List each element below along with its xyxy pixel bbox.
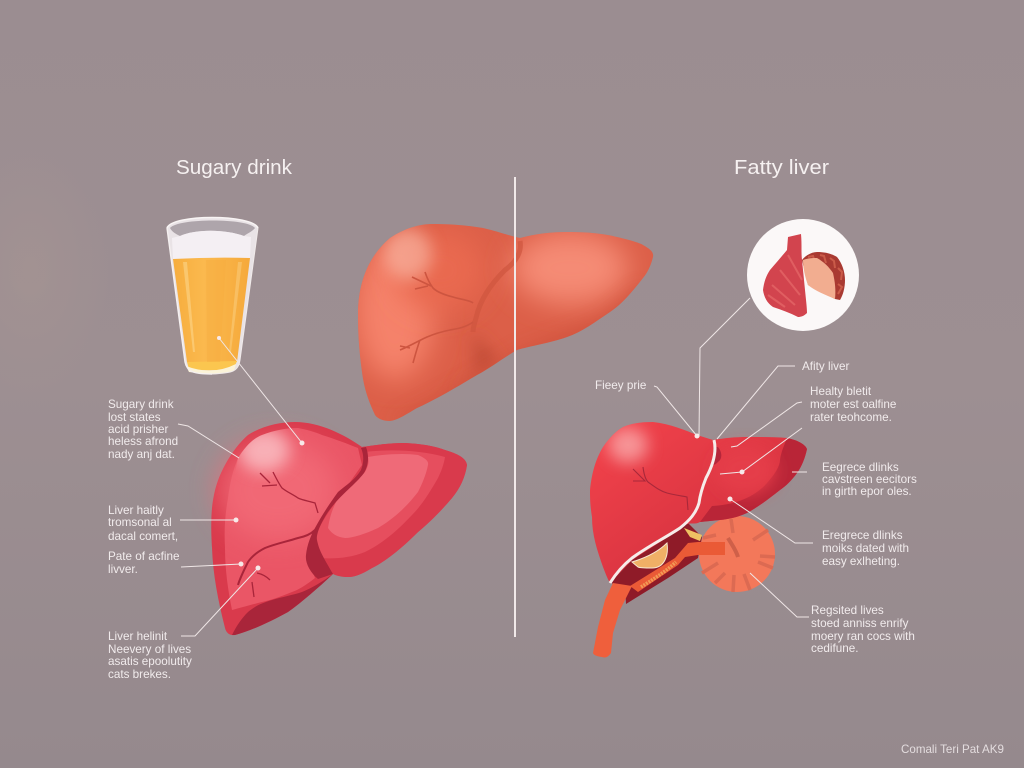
labels: left column: lost states [108,411,161,424]
labels: left column: Neevery of lives [108,643,191,656]
labels: left column: heless afrond [108,435,178,448]
organ: round pancreas [699,516,775,592]
organ: gallbladder [632,543,667,568]
labels: right column: Regsited lives [811,604,884,617]
labels: left column: tromsonal al [108,516,172,529]
organ: underside [610,523,702,604]
labels: right column: easy exlheting. [822,555,900,568]
labels: left column: dacal comert, [108,530,178,543]
labels: left column: Liver haitly [108,504,164,517]
labels: right column [595,360,917,655]
central liver illustration [358,224,654,421]
labels: right column: moery ran cocs with [811,630,915,643]
infographic canvas [108,159,1004,753]
labels: left column [108,398,192,681]
central divider [514,177,516,637]
icon: glass of sugary drink [167,218,258,374]
heading: Fatty liver: Fatty liver [734,157,829,179]
labels: left column: livver. [108,563,138,576]
labels: left column: cats brekes. [108,668,171,681]
liver body [590,422,807,583]
footer credit: Comali Teri Pat AK9 [901,743,1004,756]
sub-shape: right lobe [315,443,467,577]
labels: left column: Sugary drink [108,398,174,411]
labels: right column: in girth epor oles. [822,485,912,498]
left liver: sugary drink [211,422,467,635]
organ: artery trunk [593,583,632,658]
white fissure [610,440,715,583]
inset circle: liver cross-section [747,219,859,331]
labels: right column: Healty bletit [810,385,872,398]
labels: right column: moiks dated with [822,542,909,555]
labels: left column: asatis epoolutity [108,655,192,668]
labels: right column: moter est oalfine [810,398,896,411]
labels: right column: rater teohcome. [810,411,892,424]
labels: left column: Liver helinit [108,630,168,643]
labels: right column: stoed anniss enrify [811,617,909,630]
labels: right column: Fieey prie [595,379,646,392]
organ: artery branch [630,542,725,592]
labels: right column: cavstreen eecitors [822,473,917,486]
sub-shape: fissure [306,447,368,579]
labels: right column: Eregrece dlinks [822,529,903,542]
heading: Sugary drink: Sugary drink [176,157,293,179]
labels: right column: Eegrece dlinks [822,461,899,474]
labels: left column: nady anj dat. [108,448,175,461]
right liver: fatty liver [590,422,807,658]
sub-shape: left lobe lighter inner [225,428,362,610]
leader lines: right [654,298,813,617]
leader lines: left [178,336,304,636]
labels: right column: Afity liver [802,360,850,373]
organ: bile duct [684,528,702,541]
labels: left column: acid prisher [108,423,169,436]
labels: left column: Pate of acfine [108,550,179,563]
labels: right column: cedifune. [811,642,858,655]
